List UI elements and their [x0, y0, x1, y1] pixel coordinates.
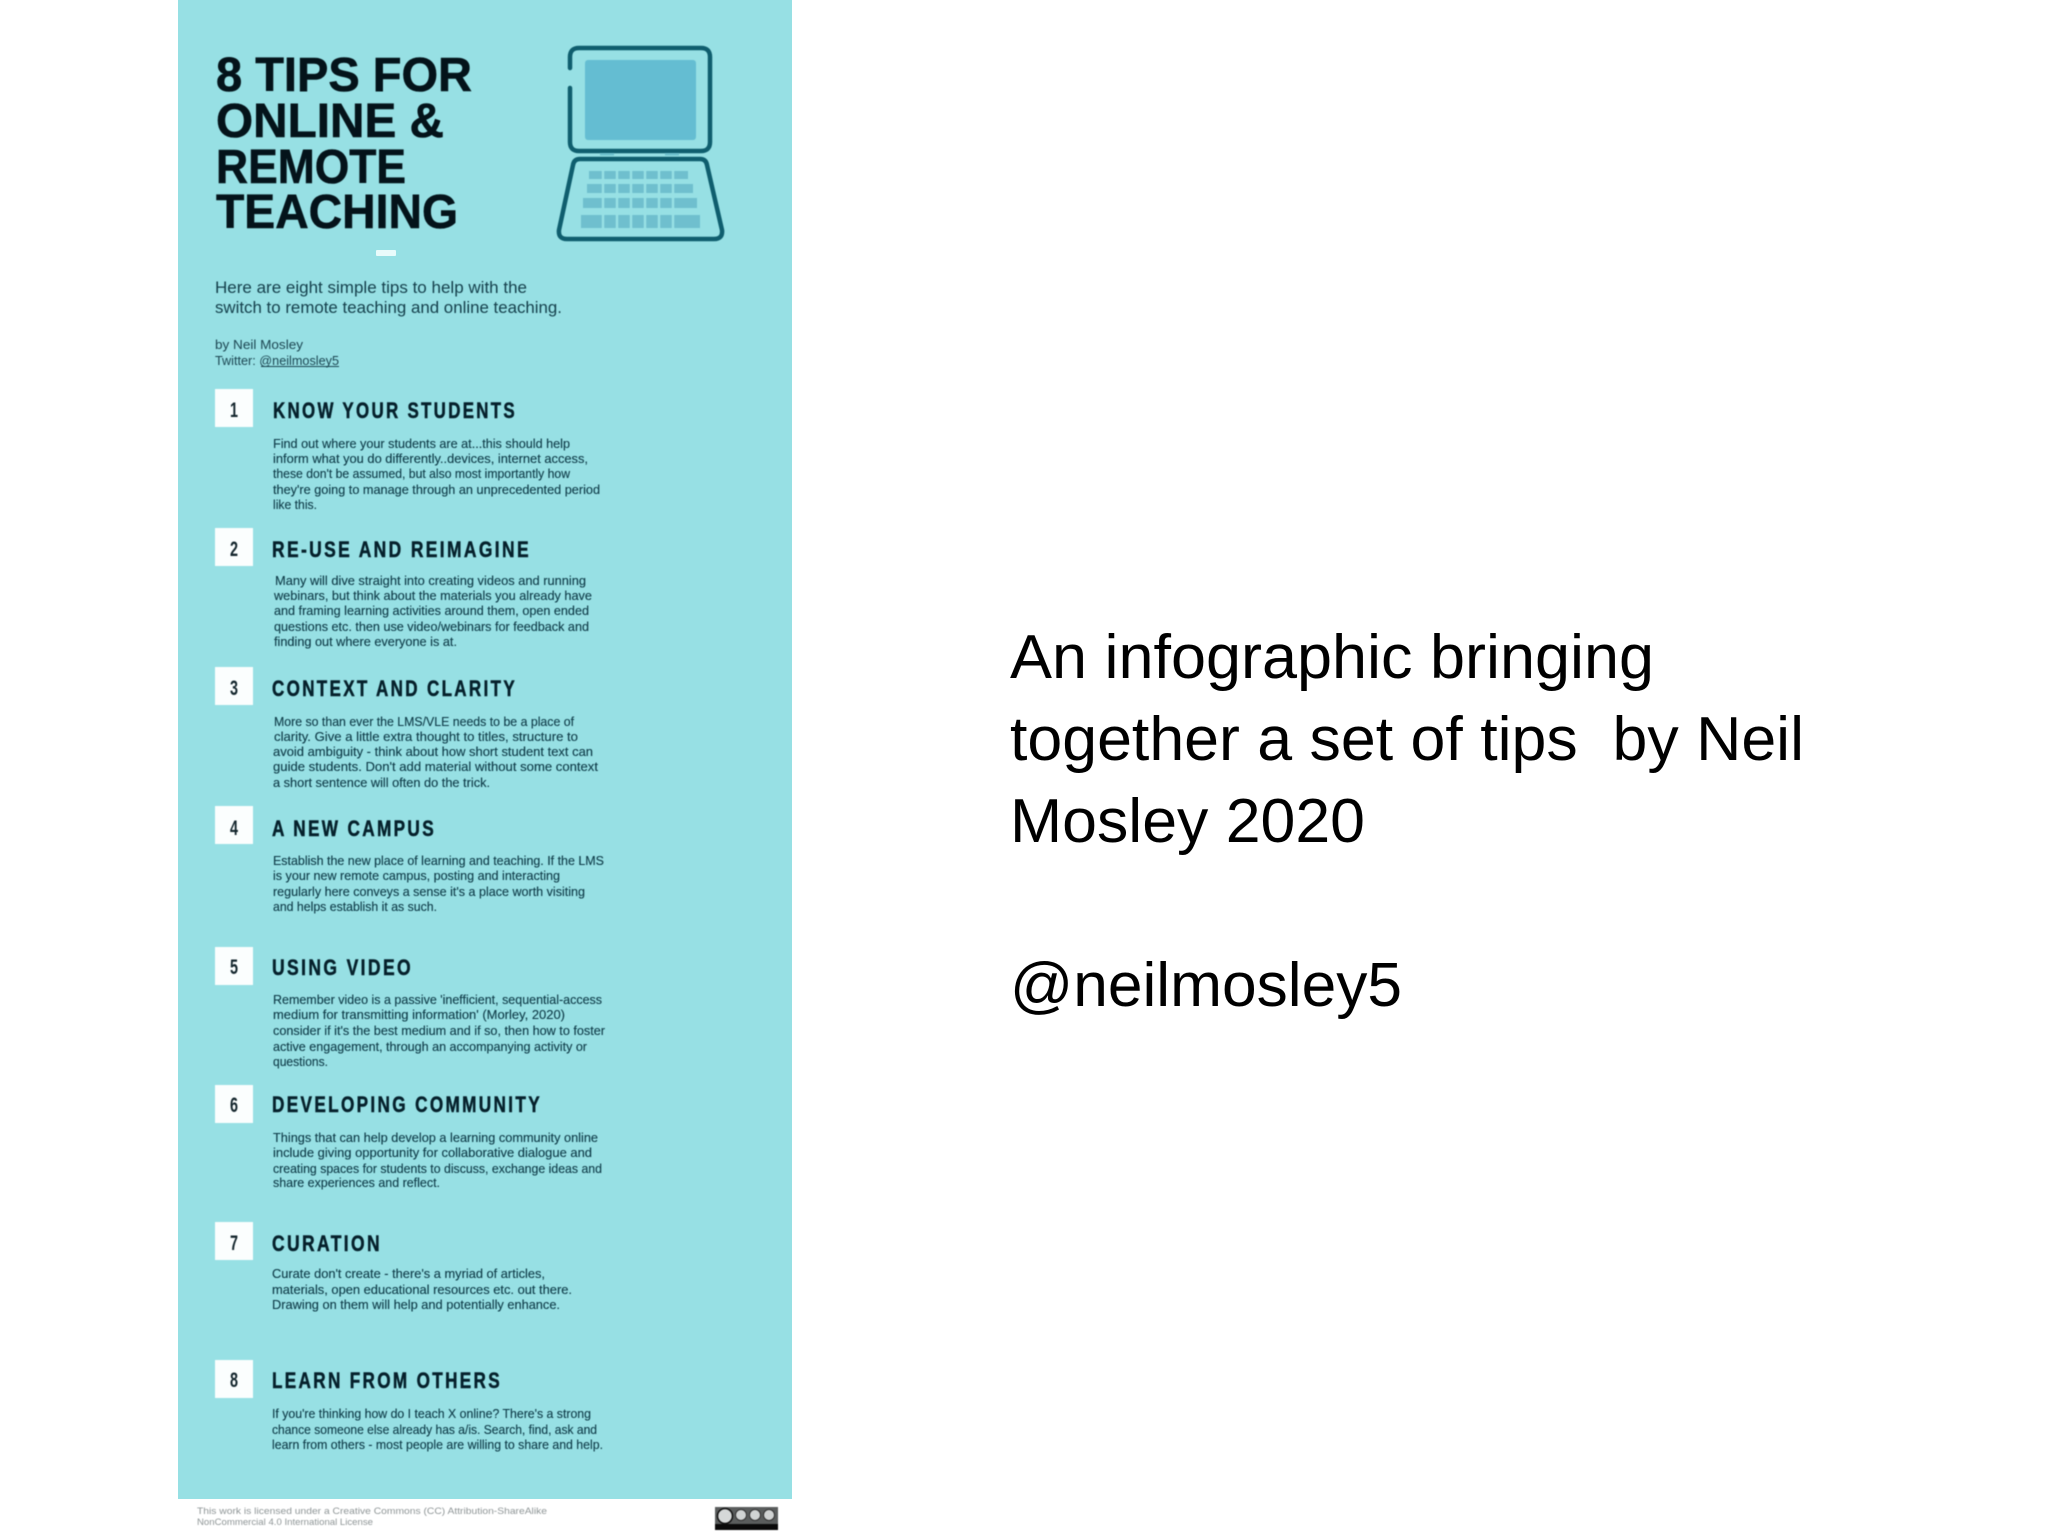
tip 4: is your new remote campus, posting and interacting — [273, 868, 560, 883]
tip 4: and helps establish it as such. — [273, 899, 437, 914]
tip 3: CONTEXT AND CLARITY — [272, 676, 517, 701]
tip 5: 5 — [230, 956, 238, 979]
tip 5: USING VIDEO — [272, 955, 413, 980]
text block: caption right: together a set of tips by Neil — [1010, 705, 1804, 774]
intro text: Here are eight simple tips to help with the — [215, 278, 527, 297]
tip 3: clarity. Give a little extra thought to titles, structure to — [274, 729, 578, 744]
author credit — [215, 338, 339, 368]
tip 7: Drawing on them will help and potentially enhance. — [272, 1297, 560, 1312]
tip 4: Establish the new place of learning and teaching. If the LMS — [273, 853, 604, 868]
tip 3 — [215, 667, 598, 790]
tip 8: learn from others - most people are willing to share and help. — [272, 1437, 603, 1452]
tip 4: 4 — [230, 817, 238, 840]
text block: caption right — [1010, 623, 1804, 1020]
tip 1: 1 — [230, 399, 238, 422]
panel: teal background — [178, 0, 792, 1499]
tip 6: share experiences and reflect. — [273, 1175, 440, 1190]
title: 8 TIPS FOR — [216, 49, 472, 102]
intro text: switch to remote teaching and online teaching. — [215, 298, 562, 317]
author credit: by Neil Mosley — [215, 338, 304, 352]
tip 2: Many will dive straight into creating videos and running — [275, 573, 586, 588]
tip 1 — [215, 389, 600, 512]
text block: caption right: Mosley 2020 — [1010, 787, 1365, 856]
tip 7: materials, open educational resources etc. out there. — [272, 1282, 572, 1297]
footer licence text: NonCommercial 4.0 International License — [197, 1517, 373, 1528]
tip 3: a short sentence will often do the trick. — [273, 775, 490, 790]
tip 5: medium for transmitting information' (Morley, 2020) — [273, 1007, 565, 1022]
tip 8: 8 — [230, 1369, 238, 1392]
tip 1: Find out where your students are at...this should help — [273, 436, 570, 451]
intro text — [215, 278, 562, 317]
title: TEACHING — [216, 186, 458, 239]
tip 2: finding out where everyone is at. — [274, 634, 457, 649]
tip 6: Things that can help develop a learning community online — [273, 1130, 598, 1145]
tip 6 — [215, 1085, 602, 1190]
tip 8 — [215, 1360, 603, 1452]
tip 3: avoid ambiguity - think about how short student text can — [273, 744, 593, 759]
tip 4: A NEW CAMPUS — [272, 816, 436, 841]
tip 2 — [215, 528, 592, 649]
tip 1: KNOW YOUR STUDENTS — [273, 398, 517, 423]
tip 8: LEARN FROM OTHERS — [272, 1368, 502, 1393]
tip 1: they're going to manage through an unprecedented period — [273, 482, 600, 497]
text block: caption right: An infographic bringing — [1010, 623, 1654, 692]
footer licence text — [197, 1506, 547, 1528]
tip 5: consider if it's the best medium and if so, then how to foster — [273, 1023, 606, 1038]
tip 7: 7 — [230, 1232, 238, 1255]
tip 8: chance someone else already has a/is. Search, find, ask and — [272, 1422, 597, 1437]
author credit: Twitter: @neilmosley5 — [215, 354, 339, 368]
tip 7: CURATION — [272, 1231, 382, 1256]
tip 5: questions. — [273, 1054, 328, 1069]
tip 3: More so than ever the LMS/VLE needs to be a place of — [274, 714, 574, 729]
tip 2: questions etc. then use video/webinars for feedback and — [274, 619, 589, 634]
tip 4: regularly here conveys a sense it's a place worth visiting — [273, 884, 585, 899]
tip 6: creating spaces for students to discuss, exchange ideas and — [273, 1161, 602, 1176]
tip 1: like this. — [273, 497, 317, 512]
tip 5: active engagement, through an accompanying activity or — [273, 1039, 588, 1054]
tip 5: Remember video is a passive 'inefficient, sequential-access — [273, 992, 602, 1007]
tip 3: guide students. Don't add material without some context — [273, 759, 598, 774]
tip 6: include giving opportunity for collaborative dialogue and — [273, 1145, 592, 1160]
tip 2: and framing learning activities around them, open ended — [274, 603, 589, 618]
tip 4 — [215, 806, 604, 914]
icon: laptop — [559, 48, 722, 239]
text block: caption right: @neilmosley5 — [1010, 951, 1402, 1020]
tip 6: 6 — [230, 1094, 238, 1117]
white dash divider — [376, 250, 396, 256]
title: REMOTE — [216, 141, 406, 194]
tip 2: RE-USE AND REIMAGINE — [272, 537, 531, 562]
tip 1: inform what you do differently..devices, internet access, — [273, 451, 588, 466]
title — [216, 49, 472, 239]
tip 3: 3 — [230, 677, 238, 700]
tip 2: webinars, but think about the materials you already have — [273, 588, 592, 603]
title: ONLINE & — [216, 95, 444, 148]
tip 2: 2 — [230, 538, 238, 561]
tip 7 — [215, 1222, 572, 1312]
footer licence text: This work is licensed under a Creative Commons (CC) Attribution-ShareAlike — [197, 1506, 547, 1517]
tip 5 — [215, 947, 606, 1069]
tip 6: DEVELOPING COMMUNITY — [272, 1092, 542, 1117]
icon: creative commons badge — [715, 1507, 778, 1530]
tip 7: Curate don't create - there's a myriad of articles, — [272, 1266, 545, 1281]
tip 8: If you're thinking how do I teach X online? There's a strong — [272, 1406, 591, 1421]
tip 1: these don't be assumed, but also most importantly how — [273, 466, 571, 481]
